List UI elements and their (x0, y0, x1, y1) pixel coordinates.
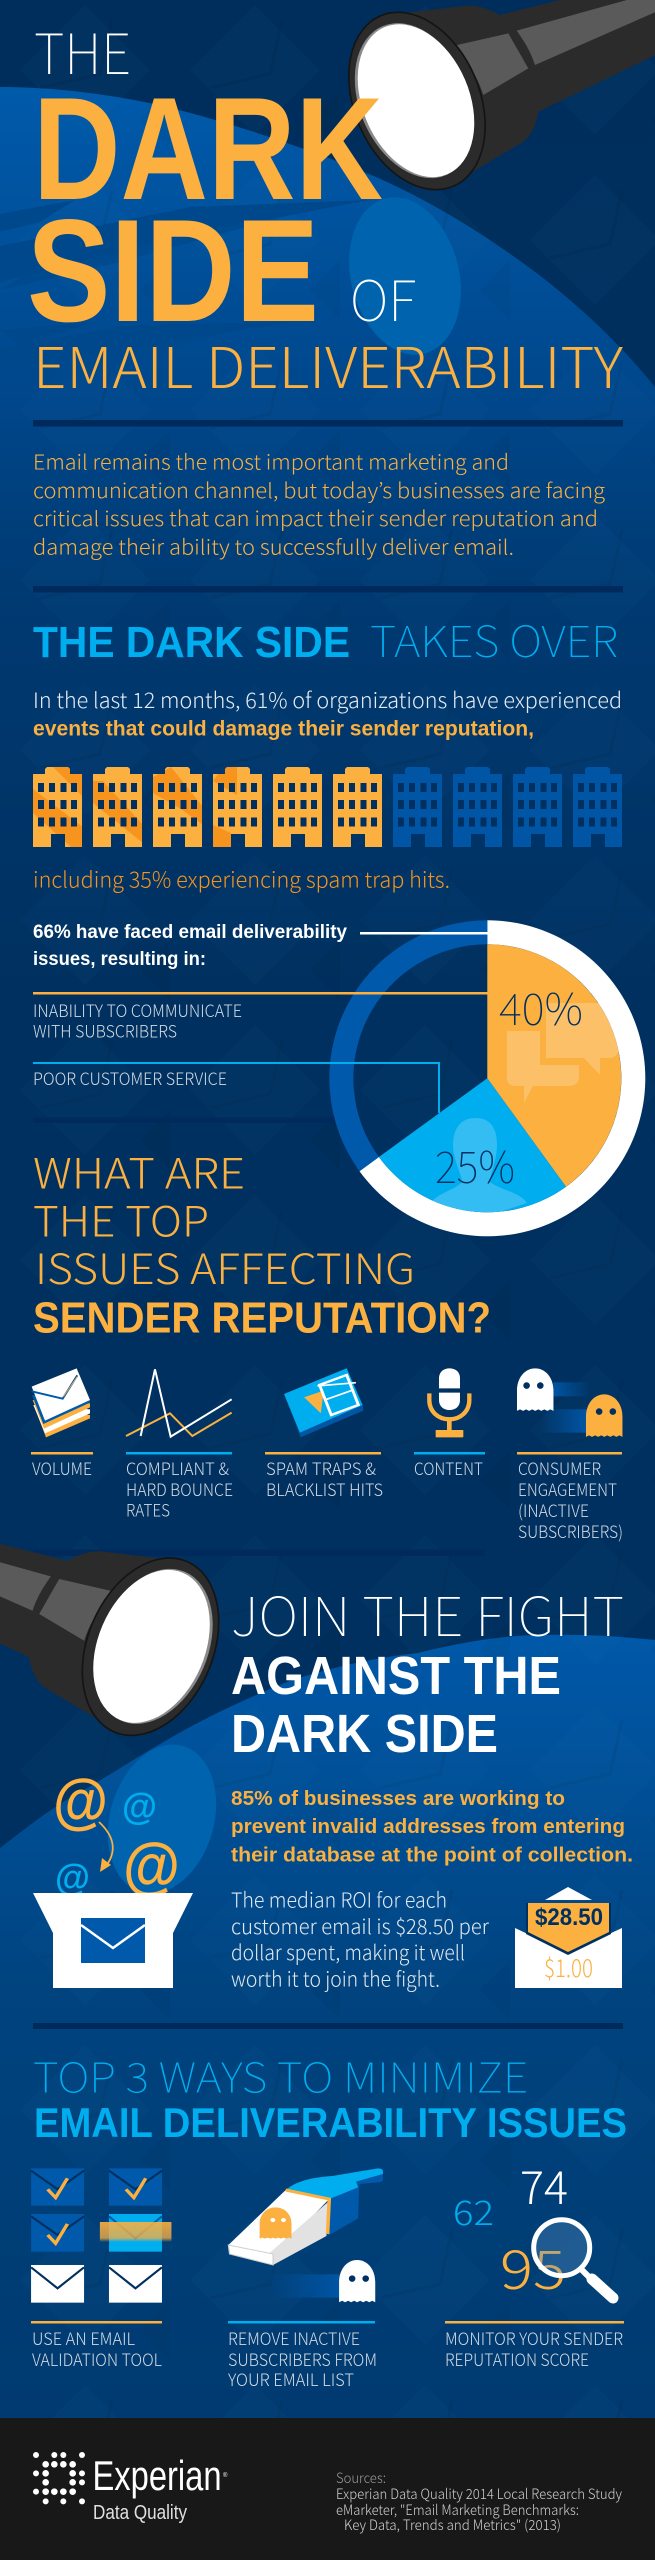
title: OF (350, 257, 416, 338)
issue: consumer engagement: CONSUMER (518, 1455, 601, 1480)
pie chart: 25% (435, 1132, 515, 1196)
statistic text: 61%: In the last 12 months, 61% of organizations have experienced (33, 684, 622, 715)
issue: complaint and bounce rates: HARD BOUNCE (126, 1476, 233, 1501)
icon: at signs and inbox box: @ (123, 1831, 180, 1901)
issue: content (414, 1368, 485, 1480)
way 3: monitor reputation score: 62 (453, 2186, 494, 2235)
statistic text: 85%: their database at the point of collection. (231, 1844, 633, 1866)
way 3: monitor reputation score: MONITOR YOUR SENDER (445, 2325, 623, 2350)
icon: ROI envelope: $1.00 (544, 1949, 593, 1985)
sources: Key Data, Trends and Metrics" (2013) (344, 2515, 561, 2535)
heading: join the fight: AGAINST THE (231, 1646, 561, 1706)
light spot: top (333, 185, 477, 367)
icon: at signs and inbox box: @ (122, 1786, 157, 1827)
way 2: remove inactive: REMOVE INACTIVE (228, 2325, 360, 2350)
issue: consumer engagement (517, 1368, 623, 1543)
title letter shadows (0, 200, 370, 392)
statistic text: 85%: prevent invalid addresses from entering (231, 1815, 625, 1838)
way 3: monitor reputation score: 95 (500, 2226, 566, 2305)
intro paragraph (33, 446, 605, 560)
heading: top 3 ways (33, 2044, 627, 2146)
way 3: monitor reputation score: 74 (520, 2152, 568, 2218)
issue: spam traps: BLACKLIST HITS (266, 1476, 383, 1501)
icon: mouse trap (284, 1368, 363, 1437)
chart callout: 40%: INABILITY TO COMMUNICATE (33, 997, 242, 1022)
statistic text: 85%: 85% of businesses are working to (231, 1787, 565, 1810)
icon: checked envelopes (31, 2168, 171, 2303)
intro paragraph: critical issues that can impact their sender reputation and (33, 502, 598, 532)
chart callout: 66%: issues, resulting in: (33, 949, 206, 970)
pie chart: 40% (499, 974, 583, 1038)
heading: top issues (33, 1140, 491, 1342)
way 1: email validation: USE AN EMAIL (32, 2325, 135, 2350)
issue: spam traps (265, 1368, 383, 1501)
icon: envelope stack (32, 1368, 90, 1437)
statistic text: ROI: customer email is $28.50 per (231, 1910, 490, 1940)
logo: Experian Data Quality: ® (223, 2472, 228, 2479)
title: THE (34, 10, 131, 91)
way 2: remove inactive: SUBSCRIBERS FROM (228, 2346, 377, 2371)
chart callout: 40% (33, 992, 488, 1042)
statistic text: 61%: events that could damage their sender reputation, (33, 718, 534, 740)
slice: 40% (487, 944, 621, 1187)
sources (336, 2468, 622, 2535)
intro paragraph: Email remains the most important marketing and (33, 446, 509, 476)
way 2: remove inactive: YOUR EMAIL LIST (228, 2366, 354, 2391)
title: DARK (33, 67, 383, 230)
logo: Experian Data Quality (33, 2452, 228, 2524)
heading: top 3 ways: TOP 3 WAYS TO MINIMIZE (33, 2044, 528, 2104)
way 2: remove inactive (228, 2168, 383, 2391)
pie chart (329, 920, 645, 1236)
light beam: bottom (0, 1635, 655, 2418)
issue: complaint and bounce rates (126, 1369, 233, 1522)
icon: at signs and inbox box: @ (53, 1767, 108, 1835)
logo: Experian Data Quality: Experian (92, 2452, 222, 2499)
issue: spam traps: SPAM TRAPS & (266, 1455, 376, 1480)
heading: join the fight (231, 1573, 624, 1764)
issue: volume: VOLUME (32, 1455, 92, 1480)
chart callout: 25% (33, 1063, 439, 1113)
icon: ROI envelope (515, 1887, 622, 1988)
sources: eMarketer, "Email Marketing Benchmarks: (336, 2500, 579, 2520)
way 1: email validation (31, 2168, 171, 2371)
icon: vacuum and ghost (228, 2168, 383, 2302)
flashlight: lower (0, 1514, 245, 1757)
issue: consumer engagement: ENGAGEMENT (518, 1476, 617, 1501)
chart callout: 40%: WITH SUBSCRIBERS (33, 1018, 177, 1042)
icon: person silhouette (430, 1118, 527, 1220)
statistic text: 61% (33, 684, 622, 740)
statistic text: ROI: worth it to join the fight. (231, 1962, 440, 1992)
way 1: email validation: VALIDATION TOOL (32, 2346, 162, 2371)
heading: the dark side takes over: THE DARK SIDE (33, 618, 350, 667)
light beam: top (0, 87, 655, 1100)
issue: consumer engagement: SUBSCRIBERS) (518, 1518, 623, 1543)
chart callout: 66%: 66% have faced email deliverability (33, 922, 347, 943)
heading: top issues: SENDER REPUTATION? (33, 1294, 491, 1342)
icon: microphone (429, 1368, 469, 1437)
sources: Experian Data Quality 2014 Local Research Study (336, 2484, 622, 2504)
issue: complaint and bounce rates: COMPLIANT & (126, 1455, 229, 1480)
issue: consumer engagement: (INACTIVE (518, 1497, 589, 1522)
icon: line chart (126, 1369, 232, 1437)
icon: at signs and inbox box: @ (55, 1857, 90, 1898)
heading: join the fight: JOIN THE FIGHT (231, 1573, 624, 1652)
way 3: monitor reputation score: REPUTATION SCORE (445, 2346, 589, 2371)
icon: speech bubbles (507, 1003, 620, 1103)
statistic text: ROI (231, 1884, 490, 1992)
statistic text: ROI: dollar spent, making it well (231, 1936, 465, 1966)
slice: 25% (379, 1078, 566, 1212)
statistic text: 35%: including 35% experiencing spam trap hits. (33, 862, 450, 894)
heading: the dark side takes over: TAKES OVER (370, 608, 618, 670)
issue: content: CONTENT (414, 1455, 483, 1480)
icon: ghosts (517, 1368, 622, 1437)
icon: magnifier (534, 2220, 613, 2298)
light spot: bottom (91, 1732, 233, 1906)
heading: join the fight: DARK SIDE (231, 1704, 498, 1764)
icon: at signs and inbox box (33, 1767, 193, 1988)
icon: ROI envelope: $28.50 (535, 1904, 603, 1931)
intro paragraph: damage their ability to successfully deliver email. (33, 530, 514, 560)
title: EMAIL DELIVERABILITY (33, 324, 623, 405)
heading: top issues: ISSUES AFFECTING (35, 1236, 415, 1297)
heading: top issues: THE TOP (33, 1188, 209, 1250)
logo: Experian Data Quality: Data Quality (93, 2502, 187, 2524)
way 3: monitor reputation score (445, 2152, 624, 2371)
arrow (99, 1822, 113, 1866)
title: SIDE (27, 189, 319, 352)
flashlight: top (323, 0, 655, 211)
statistic text: ROI: The median ROI for each (231, 1884, 447, 1914)
issue: volume (31, 1368, 93, 1480)
sources: Sources: (336, 2468, 386, 2488)
title (27, 10, 623, 405)
issue: complaint and bounce rates: RATES (126, 1496, 170, 1522)
chart callout: 25%: POOR CUSTOMER SERVICE (33, 1065, 227, 1090)
building pictogram: 6 of 10 (33, 767, 622, 847)
intro paragraph: communication channel, but today’s businesses are facing (33, 474, 605, 504)
footer (0, 2418, 655, 2560)
chart callout: 66% (33, 922, 488, 970)
heading: top issues: WHAT ARE (33, 1140, 245, 1202)
heading: the dark side takes over (33, 608, 618, 670)
statistic text: 85% (231, 1787, 633, 1866)
